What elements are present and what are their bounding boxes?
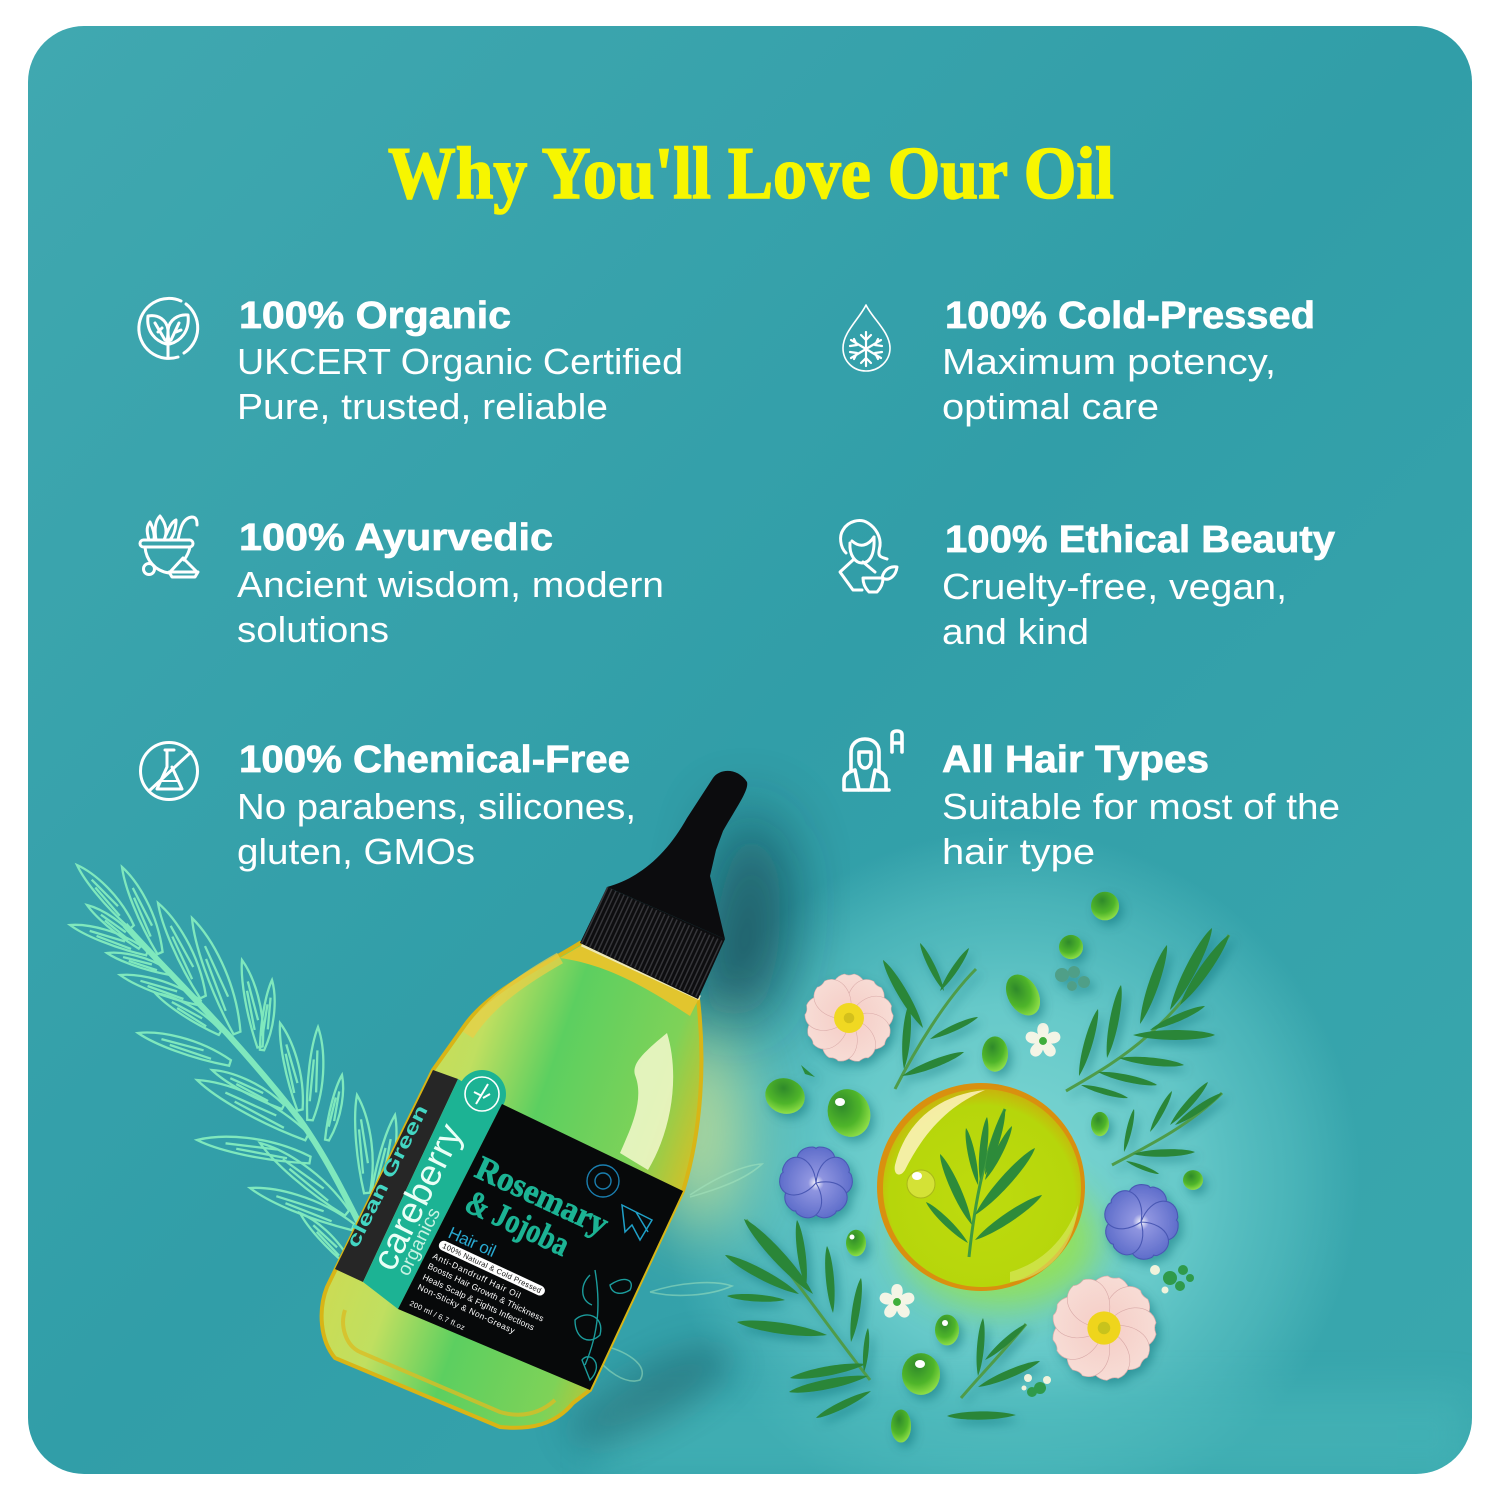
purple flowers: [776, 1147, 1179, 1264]
feature: 100% Organic: [139, 295, 683, 427]
pink flowers: [802, 973, 1157, 1383]
label text: clean green: clean Green: [343, 1102, 433, 1251]
label text: product name: & Jojoba: [460, 1184, 575, 1264]
green oil drops: [760, 892, 1203, 1442]
rosemary sprigs: [723, 925, 1233, 1421]
label text: hair oil: Hair oil: [445, 1223, 499, 1261]
description: gluten, GMOs: [237, 831, 475, 872]
label text: careberry: careberry: [363, 1117, 471, 1277]
title: Why You'll Love Our Oil: [388, 133, 1114, 215]
heading: All Hair Types: [942, 739, 1209, 781]
feature: 100% Ayurvedic: [140, 516, 664, 650]
label pill: 100% Natural & Cold Pressed: [441, 1241, 543, 1295]
botanical arrangement: [723, 892, 1233, 1442]
description: Maximum potency,: [942, 341, 1276, 382]
label dark side strip: [335, 1070, 458, 1282]
description: Ancient wisdom, modern: [237, 564, 664, 605]
icon: crossed-out flask: [140, 742, 198, 800]
heading: 100% Chemical-Free: [239, 739, 630, 781]
feature: 100% Ethical Beauty: [840, 519, 1335, 652]
product bottle: [322, 771, 747, 1428]
description: optimal care: [942, 386, 1159, 427]
rosemary line illustration: [68, 860, 762, 1381]
icon: long hair person: [844, 731, 902, 790]
description: Cruelty-free, vegan,: [942, 566, 1287, 607]
description: Suitable for most of the: [942, 786, 1340, 827]
feature: All Hair Types: [844, 731, 1340, 872]
dropper nozzle: [607, 771, 747, 939]
icon: mortar and herbs: [140, 516, 198, 577]
description: solutions: [237, 609, 389, 650]
label claims: 200 ml / 6.7 fl.oz: [408, 1299, 467, 1332]
label seal and line art: [575, 1165, 652, 1380]
label claims: Boosts Hair Growth & Thickness: [426, 1261, 545, 1323]
heading: 100% Ethical Beauty: [945, 519, 1335, 561]
description: UKCERT Organic Certified: [237, 341, 683, 382]
small white flowers: [878, 1023, 1194, 1397]
feature: 100% Chemical-Free: [140, 739, 636, 872]
description: No parabens, silicones,: [237, 786, 636, 827]
oil droplet disc: [877, 1083, 1098, 1308]
heading: 100% Cold-Pressed: [945, 295, 1315, 337]
label claims: Anti-Dandruff Hair Oil: [431, 1251, 522, 1300]
glass body with oil: [322, 943, 701, 1428]
label claims: Non-Sticky & Non-Greasy: [416, 1282, 517, 1336]
description: hair type: [942, 831, 1095, 872]
description: and kind: [942, 611, 1089, 652]
label text: organics: organics: [394, 1205, 445, 1279]
icon: woman with bowl: [840, 521, 897, 592]
description: Pure, trusted, reliable: [237, 386, 608, 427]
label claims: [408, 1251, 545, 1336]
ribbed cap: [580, 887, 725, 999]
label black front: [398, 1104, 683, 1390]
icon: drop with snowflake: [843, 305, 890, 371]
heading: 100% Ayurvedic: [239, 517, 553, 559]
icon: leaf in circle: [139, 298, 198, 358]
feature: 100% Cold-Pressed: [843, 295, 1315, 427]
label green band: [363, 1079, 502, 1309]
label text: product name: Rosemary: [470, 1150, 614, 1243]
logo tag: [458, 1070, 506, 1118]
label claims: Heals Scalp & Fights Infections: [421, 1272, 536, 1332]
heading: 100% Organic: [239, 295, 511, 337]
